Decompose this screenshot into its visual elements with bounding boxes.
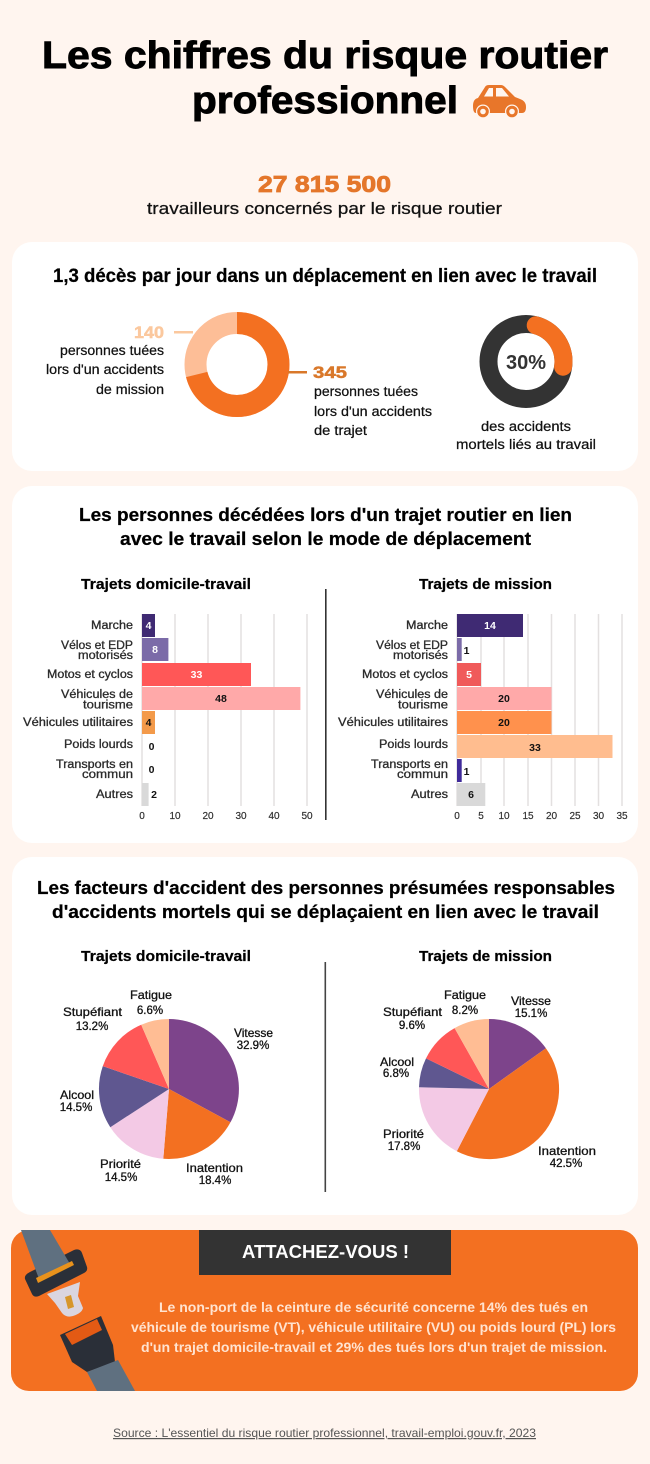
pie chart: domicile-travail: 32.9%	[237, 1040, 269, 1052]
panel: deaths by mode	[12, 486, 638, 843]
bar chart: domicile-travail	[23, 576, 313, 822]
bar chart: mission: 6	[468, 789, 474, 801]
banner text: véhicule de tourisme (VT), véhicule utilitaire (VU) ou poids lourd (PL) lors	[131, 1320, 616, 1335]
pie chart: mission: Trajets de mission	[419, 948, 552, 965]
bar chart: domicile-travail: Motos et cyclos	[47, 669, 133, 681]
bar chart: mission: 20	[498, 693, 510, 705]
bar chart: mission: Trajets de mission	[419, 576, 552, 593]
workers stat: 27 815 500	[258, 171, 391, 197]
bar chart: domicile-travail: 0	[139, 811, 145, 822]
callout: 140: 140	[134, 323, 164, 342]
bar chart: domicile-travail: Marche	[91, 620, 133, 632]
bar chart: domicile-travail: 33	[191, 669, 202, 681]
pie chart: mission: 15.1%	[515, 1008, 547, 1020]
bar chart: mission: Véhicules de	[376, 689, 448, 701]
bar chart: domicile-travail: 4	[146, 717, 152, 729]
bar chart: mission: 1	[464, 645, 470, 657]
icon: car	[473, 85, 526, 118]
callout: 345: personnes tuées	[314, 384, 418, 399]
bar chart: domicile-travail: Vélos et EDP	[61, 640, 133, 652]
bar chart: domicile-travail: 40	[268, 811, 280, 822]
pie chart: mission: 9.6%	[399, 1020, 425, 1032]
pie chart: domicile-travail: Alcool	[60, 1088, 94, 1102]
pie chart: domicile-travail: 18.4%	[199, 1175, 231, 1187]
icon: seat belt	[21, 1230, 135, 1391]
callout: 140: personnes tuées	[60, 343, 164, 358]
banner heading: ATTACHEZ-VOUS !	[242, 1242, 409, 1262]
bar chart: mission: 25	[569, 811, 581, 822]
bar chart: mission: 15	[522, 811, 534, 822]
caption: 30%: mortels liés au travail	[456, 437, 596, 452]
pie chart: domicile-travail	[60, 948, 273, 1187]
bar chart: domicile-travail: 4	[146, 620, 152, 632]
panel 2 heading: Les personnes décédées lors d'un trajet routier en lien	[79, 504, 572, 525]
callout: 345: lors d'un accidents	[314, 404, 432, 419]
bar chart: domicile-travail: Poids lourds	[64, 739, 133, 751]
panel 3 heading: Les facteurs d'accident des personnes présumées responsables	[37, 877, 615, 898]
pie chart: mission: 17.8%	[388, 1141, 420, 1153]
bar chart: domicile-travail: 0	[149, 764, 155, 776]
pie chart: domicile-travail: Inatention	[186, 1161, 243, 1175]
bar chart: domicile-travail: Autres	[96, 789, 133, 801]
panel 1 heading: 1,3 décès par jour dans un déplacement en lien avec le travail	[53, 266, 597, 287]
bar chart: mission: Vélos et EDP	[376, 640, 448, 652]
caption: 30%	[456, 419, 596, 452]
banner: seat belt	[11, 1230, 638, 1391]
pie chart: mission: 6.8%	[383, 1068, 409, 1080]
bar chart: mission: commun	[397, 769, 448, 781]
donut: 30%: 30%	[506, 352, 546, 374]
bar chart: domicile-travail: 20	[202, 811, 214, 822]
title: Les chiffres du risque routier	[42, 35, 608, 77]
callout: 140: lors d'un accidents	[46, 362, 164, 377]
bar chart: mission: 14	[484, 620, 496, 632]
pie chart: domicile-travail: Vitesse	[234, 1026, 273, 1040]
callout: 345	[288, 363, 432, 438]
bar chart: mission: Poids lourds	[379, 739, 448, 751]
banner text: d'un trajet domicile-travail et 29% des tués lors d'un trajet de mission.	[141, 1340, 607, 1355]
bar chart: domicile-travail: tourisme	[83, 700, 133, 712]
pie chart: mission	[380, 948, 596, 1170]
pie chart: domicile-travail: 14.5%	[105, 1172, 137, 1184]
bar chart: mission: Transports en	[371, 759, 448, 771]
bar chart: mission: 30	[593, 811, 604, 822]
banner text: Le non-port de la ceinture de sécurité concerne 14% des tués en	[159, 1300, 588, 1315]
callout: 140	[46, 323, 193, 397]
workers stat	[147, 171, 502, 218]
pie chart: mission: Vitesse	[511, 994, 551, 1008]
bar chart: mission	[338, 576, 628, 822]
pie chart: domicile-travail: 13.2%	[76, 1021, 108, 1033]
bar chart: domicile-travail: Véhicules utilitaires	[23, 717, 133, 729]
bar chart: mission: tourisme	[398, 700, 448, 712]
bar chart: mission: 33	[529, 742, 541, 754]
bar chart: domicile-travail: Transports en	[56, 759, 133, 771]
bar chart: mission: Véhicules utilitaires	[338, 717, 448, 729]
pie chart: domicile-travail: 6.6%	[137, 1005, 163, 1017]
pie chart: domicile-travail: Fatigue	[130, 988, 172, 1002]
panel 3 heading	[37, 877, 615, 922]
callout: 345: 345	[313, 363, 347, 382]
bar chart: domicile-travail: commun	[82, 769, 133, 781]
panel 3 heading: d'accidents mortels qui se déplaçaient en lien avec le travail	[52, 901, 599, 922]
banner heading	[199, 1230, 451, 1275]
bar chart: domicile-travail: 8	[152, 644, 158, 656]
bar chart: mission: motorisés	[393, 650, 448, 662]
bar chart: mission: 20	[546, 811, 557, 822]
bar chart: domicile-travail: 48	[215, 693, 227, 705]
pie chart: domicile-travail: 14.5%	[60, 1102, 92, 1114]
bar chart: domicile-travail: 2	[151, 789, 157, 801]
bar chart: mission: 5	[466, 669, 472, 681]
panel: accident factors	[12, 857, 638, 1215]
pie chart: mission: 8.2%	[452, 1005, 478, 1017]
pie chart: mission: 42.5%	[550, 1158, 582, 1170]
bar chart: domicile-travail: 10	[169, 811, 181, 822]
bar chart: domicile-travail: Trajets domicile-travail	[81, 576, 251, 593]
source: Source : L'essentiel du risque routier professionnel, travail-emploi.gouv.fr, 2023	[113, 1426, 536, 1440]
pie chart: domicile-travail: Trajets domicile-travail	[81, 948, 251, 965]
bar chart: domicile-travail: 0	[149, 741, 155, 753]
panel 2 heading	[79, 504, 572, 549]
title	[42, 35, 608, 122]
pie chart: mission: Fatigue	[444, 988, 486, 1002]
bar chart: mission: 5	[478, 811, 484, 822]
donut: 30%	[488, 324, 564, 399]
bar chart: domicile-travail: 30	[235, 811, 247, 822]
pie chart: mission: Priorité	[383, 1127, 424, 1141]
bar chart: mission: 1	[464, 766, 470, 778]
bar chart: mission: Motos et cyclos	[362, 669, 448, 681]
title: professionnel	[192, 80, 458, 122]
bar chart: mission: Marche	[406, 620, 448, 632]
caption: 30%: des accidents	[481, 419, 571, 434]
bar chart: domicile-travail: 50	[301, 811, 313, 822]
workers stat: travailleurs concernés par le risque routier	[147, 199, 502, 218]
pie chart: domicile-travail: Priorité	[100, 1157, 141, 1171]
donut: mission vs trajet	[196, 323, 278, 406]
panel: daily deaths	[12, 242, 638, 471]
bar chart: mission: 20	[498, 717, 510, 729]
panel 2 heading: avec le travail selon le mode de déplacement	[120, 528, 531, 549]
pie chart: mission: Inatention	[538, 1144, 596, 1158]
callout: 140: de mission	[96, 382, 164, 397]
bar chart: mission: 0	[454, 811, 460, 822]
bar chart: mission: 35	[616, 811, 628, 822]
pie chart: mission: Alcool	[380, 1055, 414, 1069]
callout: 345: de trajet	[314, 423, 367, 438]
bar chart: mission: Autres	[411, 789, 448, 801]
bar chart: mission: 10	[498, 811, 510, 822]
pie chart: mission: Stupéfiant	[383, 1005, 443, 1019]
banner text	[131, 1300, 616, 1355]
bar chart: domicile-travail: Véhicules de	[61, 689, 133, 701]
pie chart: domicile-travail: Stupéfiant	[63, 1005, 123, 1019]
bar chart: domicile-travail: motorisés	[78, 650, 133, 662]
